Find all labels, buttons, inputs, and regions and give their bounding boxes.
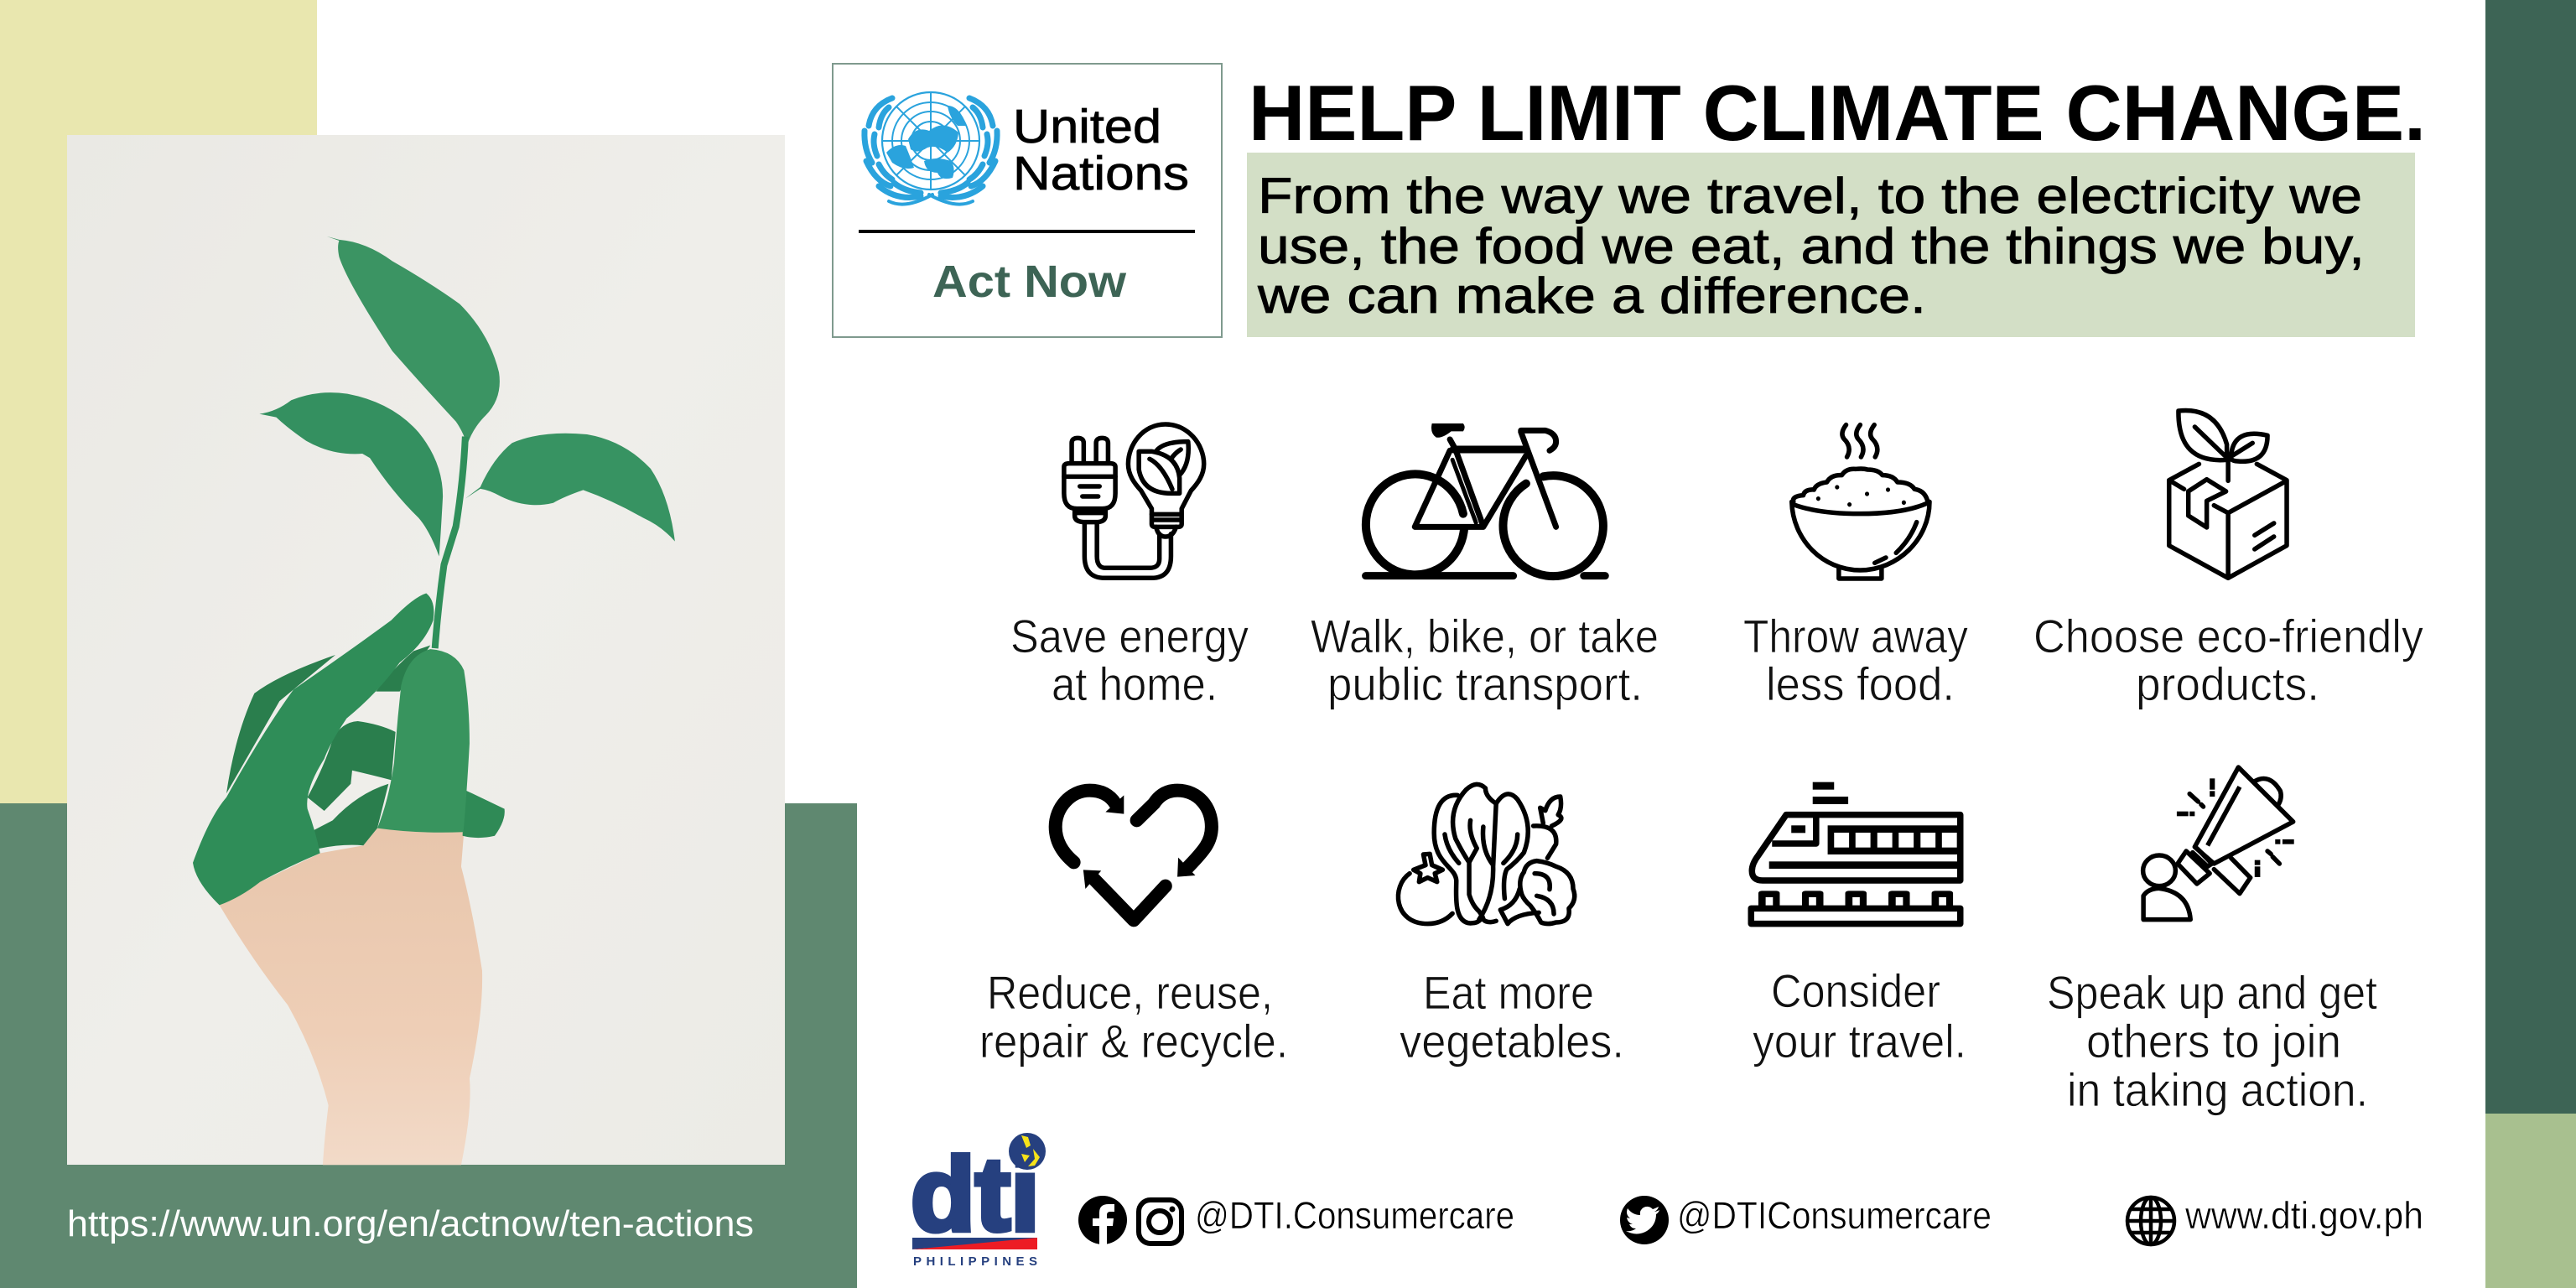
title: HELP LIMIT CLIMATE CHANGE. xyxy=(1249,69,2426,157)
label xyxy=(1311,610,1659,710)
action: eco-friendly products xyxy=(2033,410,2423,710)
logo subtitle: PHILIPPINES xyxy=(913,1254,1037,1269)
facebook and instagram handle: @DTI.Consumercare xyxy=(1195,1194,1514,1237)
twitter handle: @DTIConsumercare xyxy=(1677,1194,1992,1237)
icon: recycling heart xyxy=(1056,791,1212,920)
Act Now label: Act Now xyxy=(932,257,1127,307)
background block: green xyxy=(0,803,857,1288)
label xyxy=(979,966,1288,1067)
subtitle text xyxy=(1257,168,2365,324)
label: at home. xyxy=(1052,657,1218,710)
label: repair & recycle. xyxy=(979,1015,1288,1067)
painted hand xyxy=(193,594,505,1165)
label: less food. xyxy=(1766,657,1955,710)
label: your travel. xyxy=(1753,1015,1966,1067)
icon: instagram xyxy=(1139,1200,1182,1244)
icon: plug and leaf bulb xyxy=(1064,424,1204,578)
action: walk, bike, transit xyxy=(1311,423,1659,710)
label xyxy=(2033,610,2423,710)
label: products. xyxy=(2136,657,2319,710)
icon: twitter xyxy=(1620,1196,1669,1244)
right strip: light green xyxy=(2485,1114,2576,1288)
UN name: Nations xyxy=(1013,147,1189,200)
icon: bicycle xyxy=(1366,423,1605,576)
label: in taking action. xyxy=(2067,1063,2368,1116)
label: Speak up and get xyxy=(2047,966,2377,1019)
label: vegetables. xyxy=(1400,1015,1624,1067)
website: www.dti.gov.ph xyxy=(2184,1194,2423,1237)
label: Choose eco-friendly xyxy=(2033,610,2423,662)
label xyxy=(1010,610,1249,710)
action: save energy xyxy=(1010,424,1249,710)
action: speak up xyxy=(2047,767,2377,1116)
subtitle text: use, the food we eat, and the things we buy, xyxy=(1258,218,2365,274)
action: throw away less food xyxy=(1743,425,1968,710)
map badge xyxy=(1009,1133,1046,1170)
icon: box with sprout xyxy=(2169,410,2287,578)
wreath xyxy=(865,98,997,205)
label xyxy=(1400,966,1624,1067)
plant leaves xyxy=(259,236,675,648)
label xyxy=(2047,966,2377,1116)
label xyxy=(1743,610,1968,710)
subtitle text: From the way we travel, to the electricity we xyxy=(1258,168,2362,224)
icon: facebook xyxy=(1078,1196,1127,1244)
icon: rice bowl xyxy=(1792,425,1929,579)
action: eat more vegetables xyxy=(1398,784,1624,1067)
label: others to join xyxy=(2086,1015,2341,1067)
panel: United Nations Act Now badge xyxy=(833,64,1222,337)
panel: subtitle xyxy=(1247,153,2415,337)
icon: vegetables xyxy=(1398,784,1575,924)
action: consider your travel xyxy=(1751,782,1966,1067)
label: Save energy xyxy=(1010,610,1249,662)
label: Eat more xyxy=(1423,966,1594,1019)
label: Walk, bike, or take xyxy=(1311,610,1659,662)
icon: train xyxy=(1751,782,1961,924)
label xyxy=(1753,964,1966,1067)
logo: DTI Philippines: dti xyxy=(911,1137,1040,1253)
photo: painted hand holding plant xyxy=(67,135,785,1165)
label: public transport. xyxy=(1327,657,1643,710)
label: Consider xyxy=(1771,964,1940,1017)
icon: person with megaphone xyxy=(2143,767,2294,920)
source url: https://www.un.org/en/actnow/ten-actions xyxy=(67,1203,754,1244)
background block: pale yellow xyxy=(0,0,317,803)
UN name xyxy=(1013,100,1189,200)
icon: globe xyxy=(2127,1197,2174,1244)
label: Throw away xyxy=(1743,610,1968,662)
UN name: United xyxy=(1013,100,1161,153)
action: reduce reuse repair recycle xyxy=(979,791,1288,1067)
subtitle text: we can make a difference. xyxy=(1257,267,1926,324)
icon: UN emblem xyxy=(865,92,997,205)
label: Reduce, reuse, xyxy=(987,966,1273,1019)
right strip: dark green xyxy=(2485,0,2576,1114)
